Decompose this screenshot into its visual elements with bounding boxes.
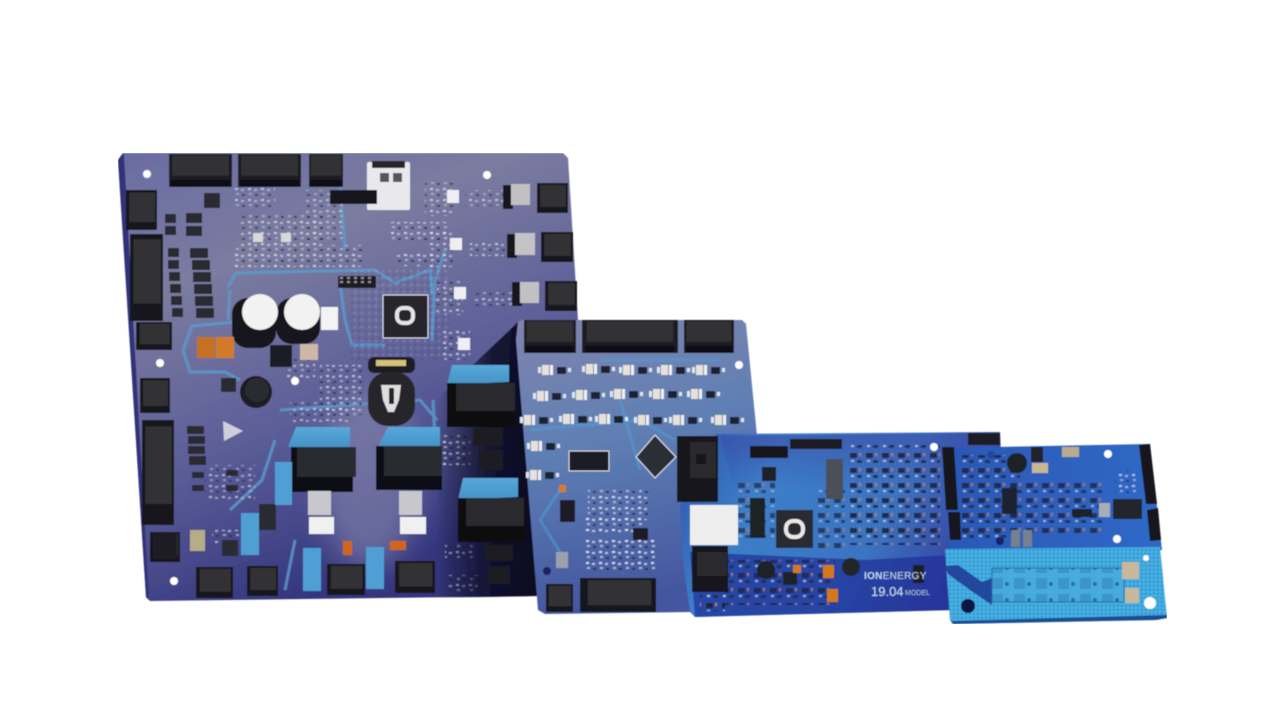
panel: third blue board	[677, 432, 1005, 617]
coin cell holder	[368, 357, 415, 426]
blue vertical capacitors	[241, 462, 384, 591]
blue film capacitors with transformers	[288, 365, 526, 542]
electrolytic capacitors	[232, 294, 338, 348]
printed logo: IONENERGY	[864, 571, 927, 582]
black component near logo	[913, 565, 924, 583]
dense part fields	[700, 445, 940, 611]
white label	[690, 505, 738, 545]
mounting holes	[143, 170, 491, 585]
panel: second board	[516, 320, 757, 614]
lower connector	[692, 546, 728, 592]
lower black parts	[153, 428, 513, 584]
orange capacitors	[793, 565, 838, 602]
left connectors	[126, 190, 180, 562]
round inductor	[842, 558, 860, 576]
printed code: MODEL	[905, 590, 930, 597]
silver regulators	[308, 491, 426, 534]
hole	[930, 443, 938, 451]
bottom connectors	[546, 578, 656, 612]
orange part	[559, 485, 566, 492]
top headers	[750, 433, 1000, 458]
dense ic	[569, 451, 609, 471]
chip with logo	[776, 510, 813, 548]
cyan section	[945, 547, 1167, 624]
main chip with logo	[383, 295, 428, 338]
small parts grid	[543, 490, 657, 575]
panel: large purple main board	[118, 153, 578, 601]
top connectors	[524, 320, 734, 353]
small ics	[750, 459, 843, 585]
left small ics	[165, 193, 276, 556]
diamond chip	[636, 435, 676, 478]
gold mesh part	[190, 530, 205, 551]
orange and tan parts	[197, 337, 406, 555]
gray and white switches	[253, 184, 539, 350]
shadow cast by second board	[436, 322, 538, 598]
top connectors	[169, 154, 343, 187]
printed number: 19.04	[871, 584, 904, 599]
panel: fourth small board	[942, 444, 1167, 624]
board edge connectors	[942, 444, 1161, 541]
tan pads	[1122, 562, 1139, 579]
mounting hole	[735, 361, 743, 369]
round inductor	[240, 376, 272, 408]
pin headers	[330, 190, 377, 288]
blue copper traces	[183, 180, 445, 590]
dense parts	[960, 455, 1137, 540]
triangle marking	[223, 421, 243, 441]
right black connectors	[537, 183, 577, 311]
cyan board holes	[961, 599, 975, 613]
component rows	[520, 364, 744, 480]
smd clusters	[205, 180, 513, 591]
holes	[987, 450, 1121, 545]
mottled lighter area	[320, 390, 420, 570]
round inductor	[1007, 453, 1027, 473]
tan and black components	[1002, 447, 1142, 547]
bottom connectors	[196, 561, 435, 598]
sd card slot	[367, 161, 410, 210]
board connector black	[677, 436, 718, 502]
trace network	[530, 360, 720, 560]
